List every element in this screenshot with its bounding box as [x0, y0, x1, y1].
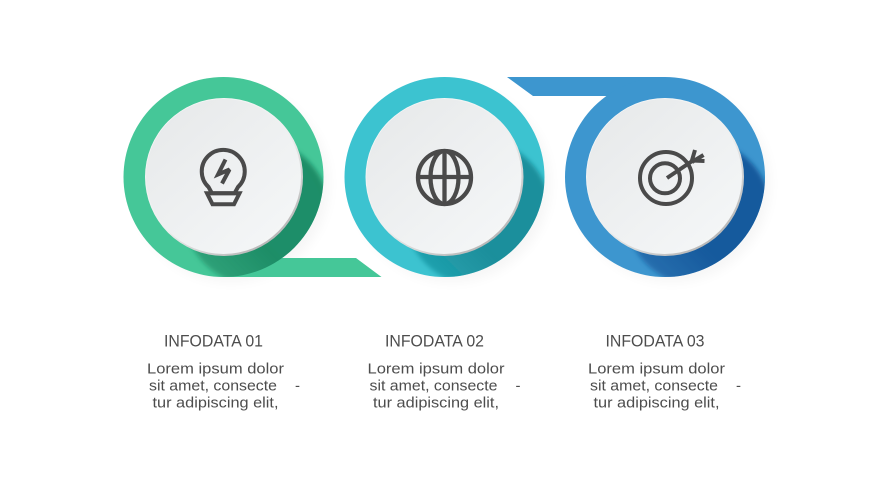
blue ring	[565, 77, 765, 277]
body 1	[147, 360, 300, 412]
body 2: -	[516, 378, 520, 394]
icon: target with arrow	[640, 150, 704, 204]
icon: light bulb	[202, 150, 245, 204]
body 1: sit amet, consecte	[149, 378, 277, 394]
body 2: tur adipiscing elit,	[373, 394, 499, 412]
text block 1	[147, 332, 300, 412]
green ring	[124, 77, 324, 277]
teal ring	[344, 77, 544, 277]
body 2: Lorem ipsum dolor	[368, 360, 505, 378]
infographic canvas	[124, 77, 765, 410]
body 1: Lorem ipsum dolor	[147, 360, 284, 378]
heading 2: INFODATA 02	[385, 332, 484, 350]
blue tail	[507, 77, 665, 100]
body 3: sit amet, consecte	[590, 378, 718, 394]
disc face 3	[587, 99, 742, 254]
step 2: teal circle	[344, 77, 550, 286]
body 3: -	[736, 378, 741, 394]
white disc 2	[366, 98, 524, 256]
heading 3: INFODATA 03	[606, 332, 704, 350]
text block 2	[368, 332, 520, 412]
body 1: -	[295, 378, 300, 394]
body 1: tur adipiscing elit,	[152, 394, 278, 412]
step 1: green circle	[124, 77, 382, 286]
body 3	[588, 360, 741, 412]
white disc 3	[586, 98, 744, 256]
body 2	[368, 360, 520, 412]
body 3: Lorem ipsum dolor	[588, 360, 725, 378]
heading 1: INFODATA 01	[164, 332, 263, 350]
green tail	[224, 258, 382, 277]
body 3: tur adipiscing elit,	[594, 394, 720, 412]
disc face 2	[366, 99, 522, 254]
icon: globe	[418, 151, 471, 204]
blue long shadow	[632, 150, 765, 277]
body 2: sit amet, consecte	[370, 378, 498, 394]
soft outer shadow 3	[574, 86, 770, 282]
soft outer shadow 1	[133, 86, 329, 282]
disc face 1	[146, 99, 301, 254]
step 3: blue circle	[507, 77, 771, 286]
text block 3	[588, 332, 741, 412]
green long shadow	[192, 150, 324, 277]
white disc 1	[145, 98, 303, 256]
soft outer shadow 2	[354, 86, 550, 282]
teal long shadow	[413, 150, 544, 277]
